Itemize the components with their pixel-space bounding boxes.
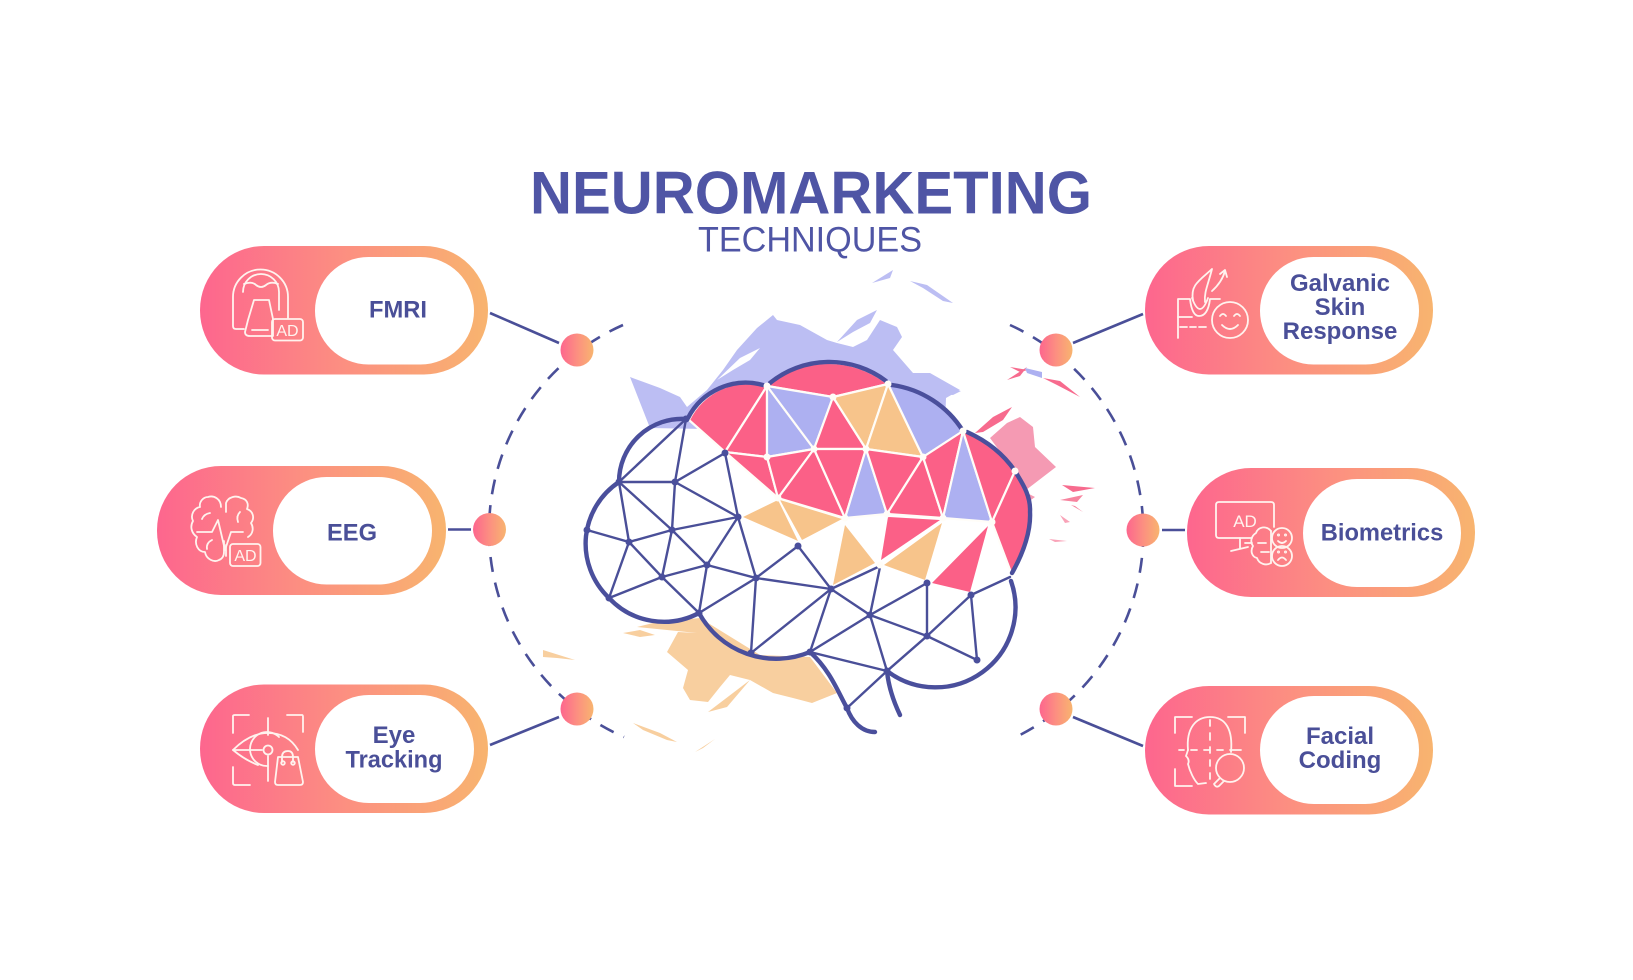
paint splashes behind brain xyxy=(543,270,1095,752)
coloured facets xyxy=(689,363,1030,592)
node dot: EEG xyxy=(473,513,506,546)
label: Galvanic Skin Response xyxy=(1283,270,1397,345)
icon: brain with EEG wave and ad xyxy=(191,496,260,566)
subtitle: TECHNIQUES xyxy=(698,221,922,260)
panel: Galvanic Skin Response xyxy=(1145,246,1433,374)
node dot: Facial Coding xyxy=(1040,692,1072,726)
node dot: Eye Tracking xyxy=(560,692,594,726)
panel: EEG xyxy=(157,466,446,595)
icon: brain with EEG wave and ad: AD xyxy=(234,548,257,565)
panel: Facial Coding xyxy=(1145,686,1433,814)
icon: MRI scanner with ad xyxy=(233,269,303,340)
dashed arc right xyxy=(1010,325,1143,737)
label: Galvanic Skin Response: Skin xyxy=(1315,294,1365,321)
label: Eye Tracking: Eye xyxy=(373,722,415,749)
white nodes xyxy=(764,380,1018,568)
connector: Eye Tracking xyxy=(490,717,559,745)
dashed arc left xyxy=(489,325,624,737)
panel: FMRI xyxy=(200,246,488,374)
node dot: Biometrics xyxy=(1126,514,1160,546)
connector: EEG xyxy=(448,528,471,531)
icon: skin follicle with smiley xyxy=(1178,269,1248,338)
label: Facial Coding xyxy=(1299,723,1381,774)
node dot: Galvanic Skin Response xyxy=(1040,334,1072,366)
label: Biometrics: Biometrics xyxy=(1321,520,1443,546)
connector: Facial Coding xyxy=(1073,717,1143,746)
label: FMRI: FMRI xyxy=(369,296,427,324)
icon: monitor, brain and faces: AD xyxy=(1233,512,1257,531)
mesh lines xyxy=(587,419,1010,708)
icon: eye target with shopping bag xyxy=(233,715,303,785)
connector: FMRI xyxy=(490,313,559,343)
connector: Galvanic Skin Response xyxy=(1073,314,1143,343)
label: Facial Coding: Coding xyxy=(1299,747,1381,774)
label: Galvanic Skin Response: Response xyxy=(1283,318,1397,345)
brain xyxy=(584,362,1030,732)
icon: monitor, brain and faces xyxy=(1216,502,1292,566)
panel: Biometrics xyxy=(1187,468,1475,597)
brain outline xyxy=(586,362,1030,732)
node dot: FMRI xyxy=(560,334,594,366)
icon: face scan with magnifier xyxy=(1175,717,1245,787)
mesh nodes xyxy=(584,416,980,712)
label: Facial Coding: Facial xyxy=(1306,723,1374,750)
label: Eye Tracking: Tracking xyxy=(346,746,442,774)
label: EEG: EEG xyxy=(327,520,377,546)
label: Galvanic Skin Response: Galvanic xyxy=(1290,270,1390,297)
label: Eye Tracking xyxy=(346,722,442,774)
icon: MRI scanner with ad: AD xyxy=(276,323,299,340)
panel: Eye Tracking xyxy=(200,684,488,813)
connector: Biometrics xyxy=(1162,529,1185,531)
title: NEUROMARKETING xyxy=(530,159,1092,226)
